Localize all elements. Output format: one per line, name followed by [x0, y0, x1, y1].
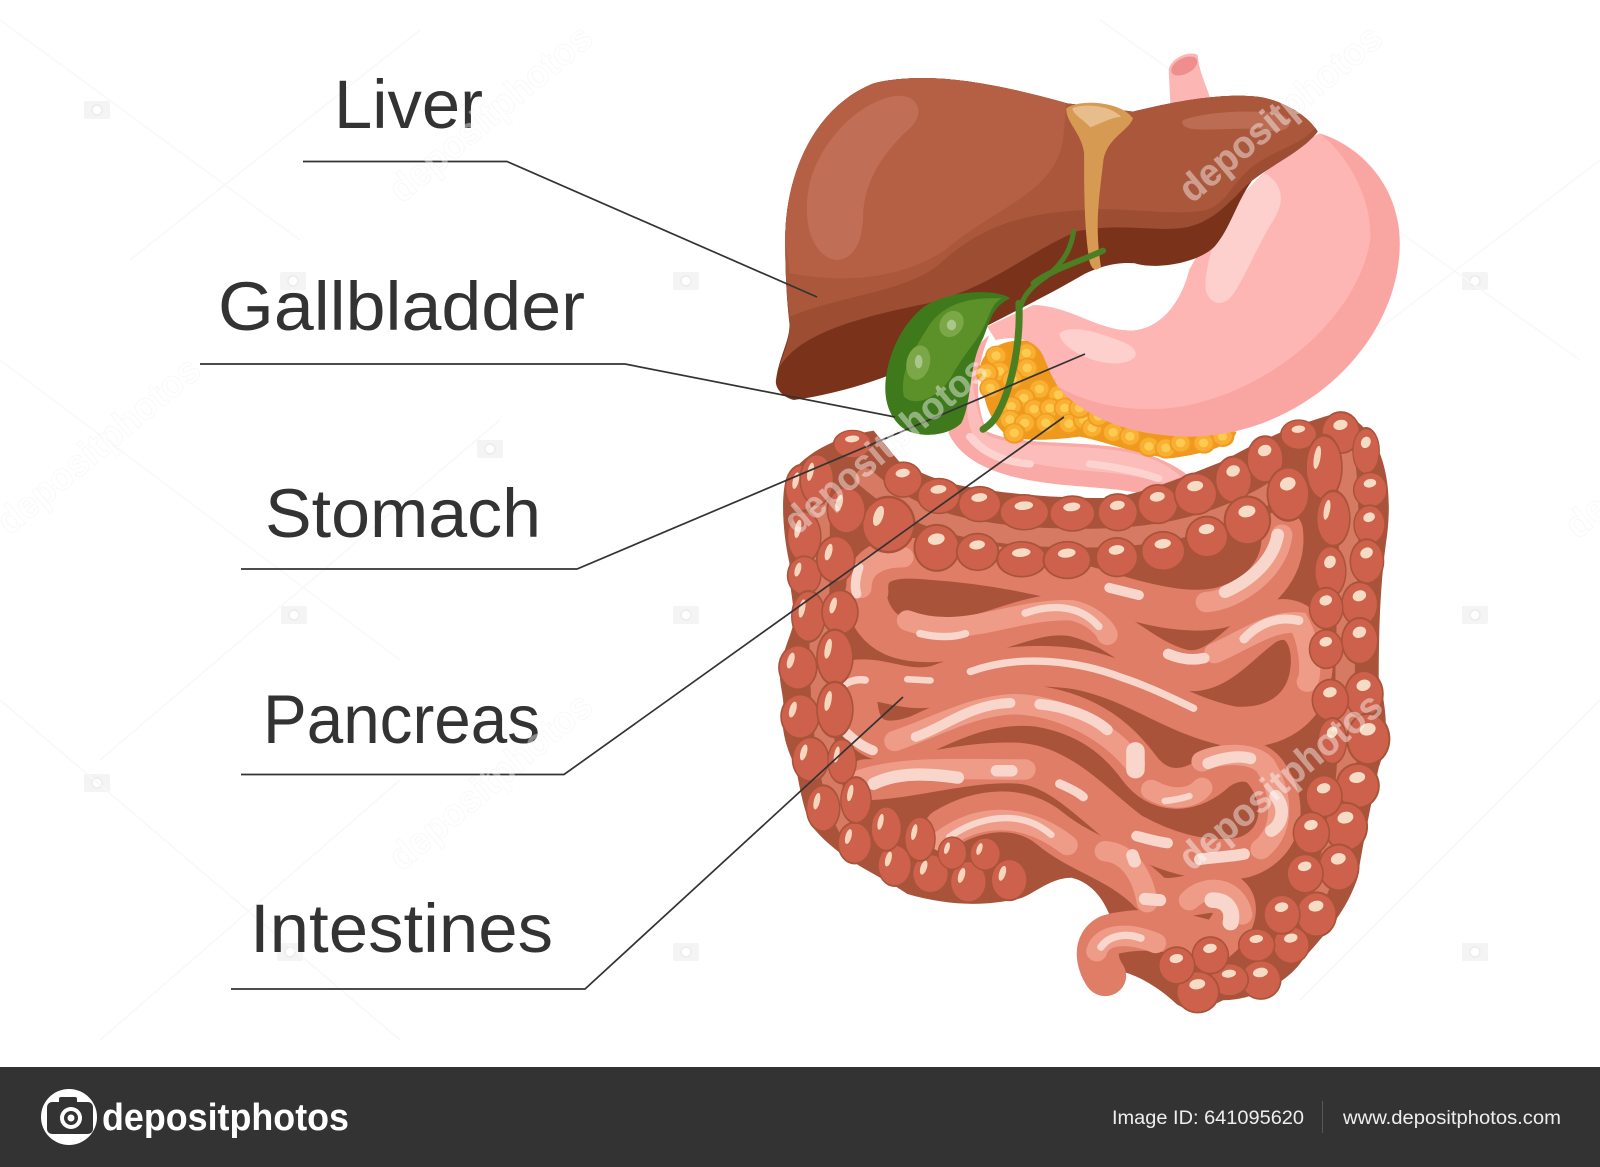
- stomach body: [987, 133, 1400, 437]
- esophagus: [1167, 53, 1210, 105]
- colon band: [819, 457, 1349, 914]
- loop highlights: [842, 535, 1299, 947]
- watermark text: depositphotos: [381, 17, 601, 211]
- label: Intestines: Intestines: [250, 890, 553, 967]
- logo icon: camera: [41, 1089, 97, 1145]
- intestine silhouette: [780, 412, 1389, 1010]
- gallbladder inner: [903, 298, 1002, 401]
- bile ducts: [983, 232, 1103, 429]
- watermark text: depositphotos: [381, 685, 601, 879]
- watermark text: depositphotos: [1171, 685, 1391, 879]
- loop lighter bands: [861, 535, 1310, 951]
- liver highlights: [807, 96, 1290, 260]
- organ: intestines: [778, 411, 1390, 1014]
- watermark text: depositphotos: [776, 349, 996, 543]
- label: Pancreas: [241, 417, 1064, 774]
- liver mid layer: [779, 78, 1318, 368]
- label: Pancreas: Pancreas: [263, 681, 540, 758]
- organ: gallbladder: [885, 232, 1103, 435]
- organ: stomach and duodenum: [949, 53, 1400, 495]
- image id: Image ID: 641095620: [1112, 1108, 1304, 1129]
- organ: liver: [776, 78, 1318, 400]
- gallbladder body: [885, 292, 1010, 435]
- label: Intestines: [231, 697, 903, 989]
- liver main layer: [785, 78, 1315, 317]
- gallbladder highlights: [904, 309, 967, 381]
- colon pouches: [778, 411, 1390, 1014]
- footer bar: [0, 1067, 1600, 1167]
- label: Gallbladder: Gallbladder: [218, 268, 585, 345]
- label: Liver: [303, 66, 817, 297]
- watermark text: [0, 17, 1600, 879]
- watermark text: depositphotos: [1171, 17, 1391, 211]
- pancreas: [976, 340, 1236, 459]
- label: Liver: Liver: [334, 66, 483, 143]
- hepatic ligament: [1066, 103, 1133, 270]
- label: Stomach: Stomach: [265, 475, 541, 552]
- logo wordmark: depositphotos: [102, 1097, 349, 1139]
- label: Gallbladder: [200, 268, 895, 417]
- duodenum: [949, 335, 1194, 495]
- small intestine loops: [848, 531, 1312, 976]
- website: www.depositphotos.com: [1342, 1108, 1561, 1129]
- liver underside: [776, 78, 1318, 400]
- liver left lobe: [785, 78, 1066, 278]
- label: Stomach: [241, 354, 1085, 569]
